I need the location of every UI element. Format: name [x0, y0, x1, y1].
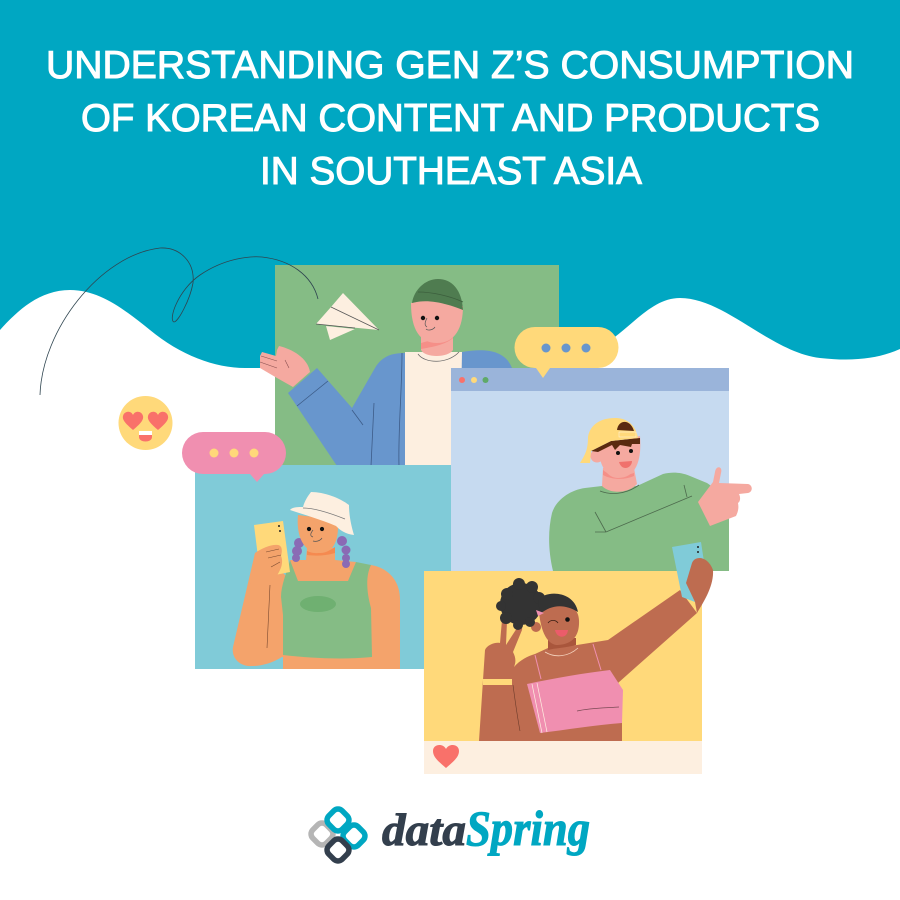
emoji: heart eyes — [118, 396, 172, 450]
man's hand — [260, 346, 310, 387]
man's yellow cap — [580, 418, 638, 463]
woman's neck shadow — [548, 638, 576, 650]
man's shirt — [404, 352, 462, 466]
man's sweater — [549, 473, 729, 571]
woman's skin, body and arms — [479, 590, 697, 741]
logo: dataSpring — [309, 800, 590, 863]
panel: green, man with paper plane — [260, 265, 559, 466]
panel: yellow photo, woman taking selfie — [424, 542, 713, 774]
woman's right arm — [360, 564, 400, 669]
browser title bar — [451, 368, 729, 391]
woman's blue phone — [672, 542, 706, 602]
man's pointing hand — [698, 467, 752, 526]
title — [46, 44, 854, 193]
woman's torso skin — [283, 650, 372, 669]
paper plane — [316, 293, 379, 340]
man's neck — [602, 468, 637, 492]
speech bubble: yellow — [514, 327, 618, 378]
woman's braids — [292, 536, 350, 568]
woman's head — [531, 622, 541, 632]
panel: browser window, man pointing — [451, 368, 752, 571]
woman's hair — [496, 578, 578, 630]
title: IN SOUTHEAST ASIA — [260, 150, 642, 193]
logo: dataSpring: Spring — [466, 800, 590, 856]
paper plane flight path — [40, 248, 318, 395]
woman's face — [298, 515, 338, 553]
woman's pink top — [527, 670, 623, 733]
panel: teal, woman with phone — [195, 465, 451, 669]
speech bubble: pink — [182, 432, 286, 482]
woman's raised hand — [686, 558, 713, 613]
logo wordmark: data — [382, 804, 466, 855]
teal wave header background — [0, 0, 900, 368]
man's head — [590, 450, 604, 462]
man's beanie — [412, 279, 463, 310]
title: UNDERSTANDING GEN Z’S CONSUMPTION — [46, 44, 854, 87]
woman's phone — [254, 521, 290, 575]
photo caption bar — [424, 741, 702, 774]
woman's hand — [250, 545, 282, 590]
title: OF KOREAN CONTENT AND PRODUCTS — [81, 97, 820, 140]
woman's bucket hat — [290, 492, 354, 535]
icon: heart — [433, 745, 459, 768]
woman's tank top — [281, 560, 372, 658]
man's head — [411, 298, 463, 343]
man's hair — [591, 438, 640, 452]
logo mark — [309, 807, 367, 863]
woman's left arm — [233, 553, 290, 666]
man's jacket — [288, 353, 405, 466]
man's neck — [421, 335, 453, 356]
